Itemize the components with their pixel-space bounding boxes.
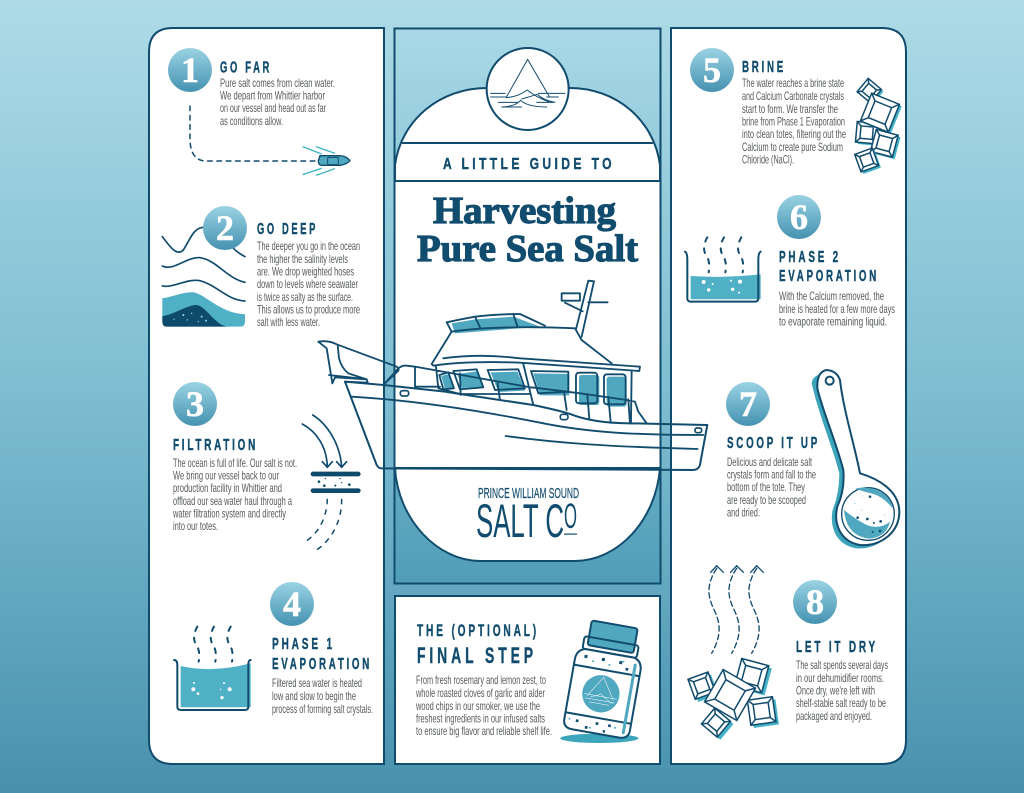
body text: and Calcium Carbonate crystals <box>742 89 844 103</box>
icon: boat <box>318 281 707 470</box>
number badge 3 <box>173 382 217 426</box>
panel: centre title <box>394 28 660 584</box>
body text: brine from Phase 1 Evaporation <box>742 114 845 128</box>
number badge 7: 7 <box>739 384 757 424</box>
number badge 1: 1 <box>181 50 199 90</box>
number badge 6 <box>777 195 821 239</box>
body text: as conditions allow. <box>220 114 283 128</box>
body text: to ensure big flavor and reliable shelf life. <box>416 724 552 738</box>
body text: are. We drop weighted hoses <box>257 264 354 278</box>
body text: wood chips in our smoker, we use the <box>415 699 540 713</box>
body text <box>415 673 552 738</box>
body text: crystals form and fall to the <box>727 468 816 482</box>
body text: Chloride (NaCl). <box>742 152 794 166</box>
white title body <box>396 181 660 471</box>
step 1: go far <box>168 48 350 175</box>
icon: salt jar <box>560 619 648 743</box>
body text <box>727 455 816 520</box>
number badge 6: 6 <box>790 197 808 237</box>
number badge 3: 3 <box>186 384 204 424</box>
step 8: let it dry <box>688 566 888 740</box>
number badge 1 <box>168 48 212 92</box>
white arch <box>395 88 660 181</box>
body text: bottom of the tote. They <box>727 480 805 494</box>
body text: The salt spends several days <box>796 658 888 672</box>
step 5: brine <box>690 48 902 174</box>
heading: GO FAR <box>220 60 272 76</box>
body text: Calcium to create pure Sodium <box>742 140 843 154</box>
heading: PHASE 2 <box>779 249 841 266</box>
body text: The ocean is full of life. Our salt is not. <box>173 456 297 470</box>
body text: Pure salt comes from clean water. <box>220 76 335 90</box>
panel: right steps <box>671 28 906 764</box>
body text: and dried. <box>727 506 760 520</box>
portholes <box>400 391 702 433</box>
heading: LET IT DRY <box>796 639 878 656</box>
heading: PHASE 1 <box>272 636 335 653</box>
logo: Prince William Sound Salt Co <box>476 485 579 547</box>
body text: to evaporate remaining liquid. <box>779 314 887 328</box>
body text <box>272 676 373 716</box>
heading: GO DEEP <box>257 221 318 238</box>
step 6: phase 2 evaporation <box>685 195 895 328</box>
step 2: go deep <box>162 206 360 329</box>
body text: into clean totes, filtering out the <box>742 127 846 141</box>
icon: rising air arrows <box>709 566 763 653</box>
body text: on our vessel and head out as far <box>220 101 326 115</box>
body text: low and slow to begin the <box>272 689 356 703</box>
number badge 2: 2 <box>216 208 234 248</box>
number badge 8: 8 <box>806 582 824 622</box>
flybridge <box>432 314 640 371</box>
body text <box>220 76 335 128</box>
number badge 2 <box>203 206 247 250</box>
heading: EVAPORATION <box>779 268 879 285</box>
body text: shelf-stable salt ready to be <box>796 696 886 710</box>
heading: EVAPORATION <box>272 656 372 673</box>
body text <box>742 76 846 166</box>
heading: FILTRATION <box>173 437 258 454</box>
body text: This allows us to produce more <box>257 302 360 316</box>
body text: process of forming salt crystals. <box>272 702 373 716</box>
body text: Delicious and delicate salt <box>727 455 812 469</box>
number badge 8 <box>793 580 837 624</box>
heading: THE (OPTIONAL) <box>417 622 539 640</box>
number badge 5: 5 <box>703 50 721 90</box>
number badge 4: 4 <box>283 584 301 624</box>
heading: SCOOP IT UP <box>727 435 820 452</box>
body text: the higher the salinity levels <box>257 252 348 266</box>
icon: scoop <box>812 370 899 548</box>
step 4: phase 1 evaporation <box>174 582 373 716</box>
logo: Prince William Sound Salt Co: PRINCE WILLIAM SOUND <box>478 485 579 502</box>
body text <box>796 658 888 723</box>
number badge 4 <box>270 582 314 626</box>
body text <box>779 289 895 328</box>
heading: BRINE <box>742 59 786 76</box>
panel: final step <box>395 596 660 764</box>
body text: freshest ingredients in our infused salts <box>416 712 545 726</box>
icon: evaporation tank <box>174 627 251 710</box>
number badge 7 <box>726 382 770 426</box>
heading <box>272 636 372 673</box>
body text: salt with less water. <box>257 315 320 329</box>
body text: Once dry, we're left with <box>796 684 875 698</box>
body text: whole roasted cloves of garlic and alder <box>415 686 545 700</box>
body text: are ready to be scooped <box>727 493 806 507</box>
hull <box>345 382 707 470</box>
icon: ocean layers <box>162 227 245 327</box>
icon: boat route <box>190 106 350 175</box>
body text: Filtered sea water is heated <box>272 676 362 690</box>
white lower lobe <box>395 468 660 561</box>
arch band lines <box>395 143 660 181</box>
icon: salt crystals <box>855 78 902 174</box>
icon: evaporation tank <box>685 237 761 302</box>
body text: The water reaches a brine state <box>742 76 844 90</box>
body text: We bring our vessel back to our <box>173 468 279 482</box>
body text: production facility in Whittier and <box>173 481 282 495</box>
body text: water filtration system and directly <box>172 506 286 520</box>
body text <box>172 456 297 533</box>
icon: filter <box>302 415 361 553</box>
body text: is twice as salty as the surface. <box>257 290 353 304</box>
heading large: FINAL STEP <box>417 643 537 668</box>
body text: We depart from Whittier harbor <box>220 88 325 102</box>
step 3: filtration <box>172 382 361 553</box>
body text: The deeper you go in the ocean <box>257 239 360 253</box>
number badge 5 <box>690 48 734 92</box>
icon: salt crystals <box>688 659 779 740</box>
panel: left steps <box>149 28 384 764</box>
heading <box>779 249 879 285</box>
body text: down to levels where seawater <box>257 277 358 291</box>
body text: in our dehumidifier rooms. <box>796 671 884 685</box>
logo: Prince William Sound Salt Co: SALT C <box>476 494 564 547</box>
heading: a little guide to: A LITTLE GUIDE TO <box>443 156 615 173</box>
body text: packaged and enjoyed. <box>796 709 872 723</box>
title <box>417 190 638 270</box>
body text: brine is heated for a few more days <box>779 302 895 316</box>
icon: mountain logo badge <box>487 48 569 130</box>
cabin windows <box>439 369 627 407</box>
title: Pure Sea Salt <box>417 228 638 270</box>
body text: start to form. We transfer the <box>742 102 838 116</box>
step 7: scoop it up <box>726 370 899 548</box>
body text: offload our sea water haul through a <box>173 494 292 508</box>
body text: With the Calcium removed, the <box>779 289 884 303</box>
mast <box>562 281 608 337</box>
body text: From fresh rosemary and lemon zest, to <box>416 673 546 687</box>
logo: Prince William Sound Salt Co: O <box>564 497 577 536</box>
bow pulpit <box>318 341 399 385</box>
cabin railing <box>383 364 647 423</box>
title: Harvesting <box>433 190 616 232</box>
body text <box>257 239 360 329</box>
body text: into our totes. <box>173 519 218 533</box>
